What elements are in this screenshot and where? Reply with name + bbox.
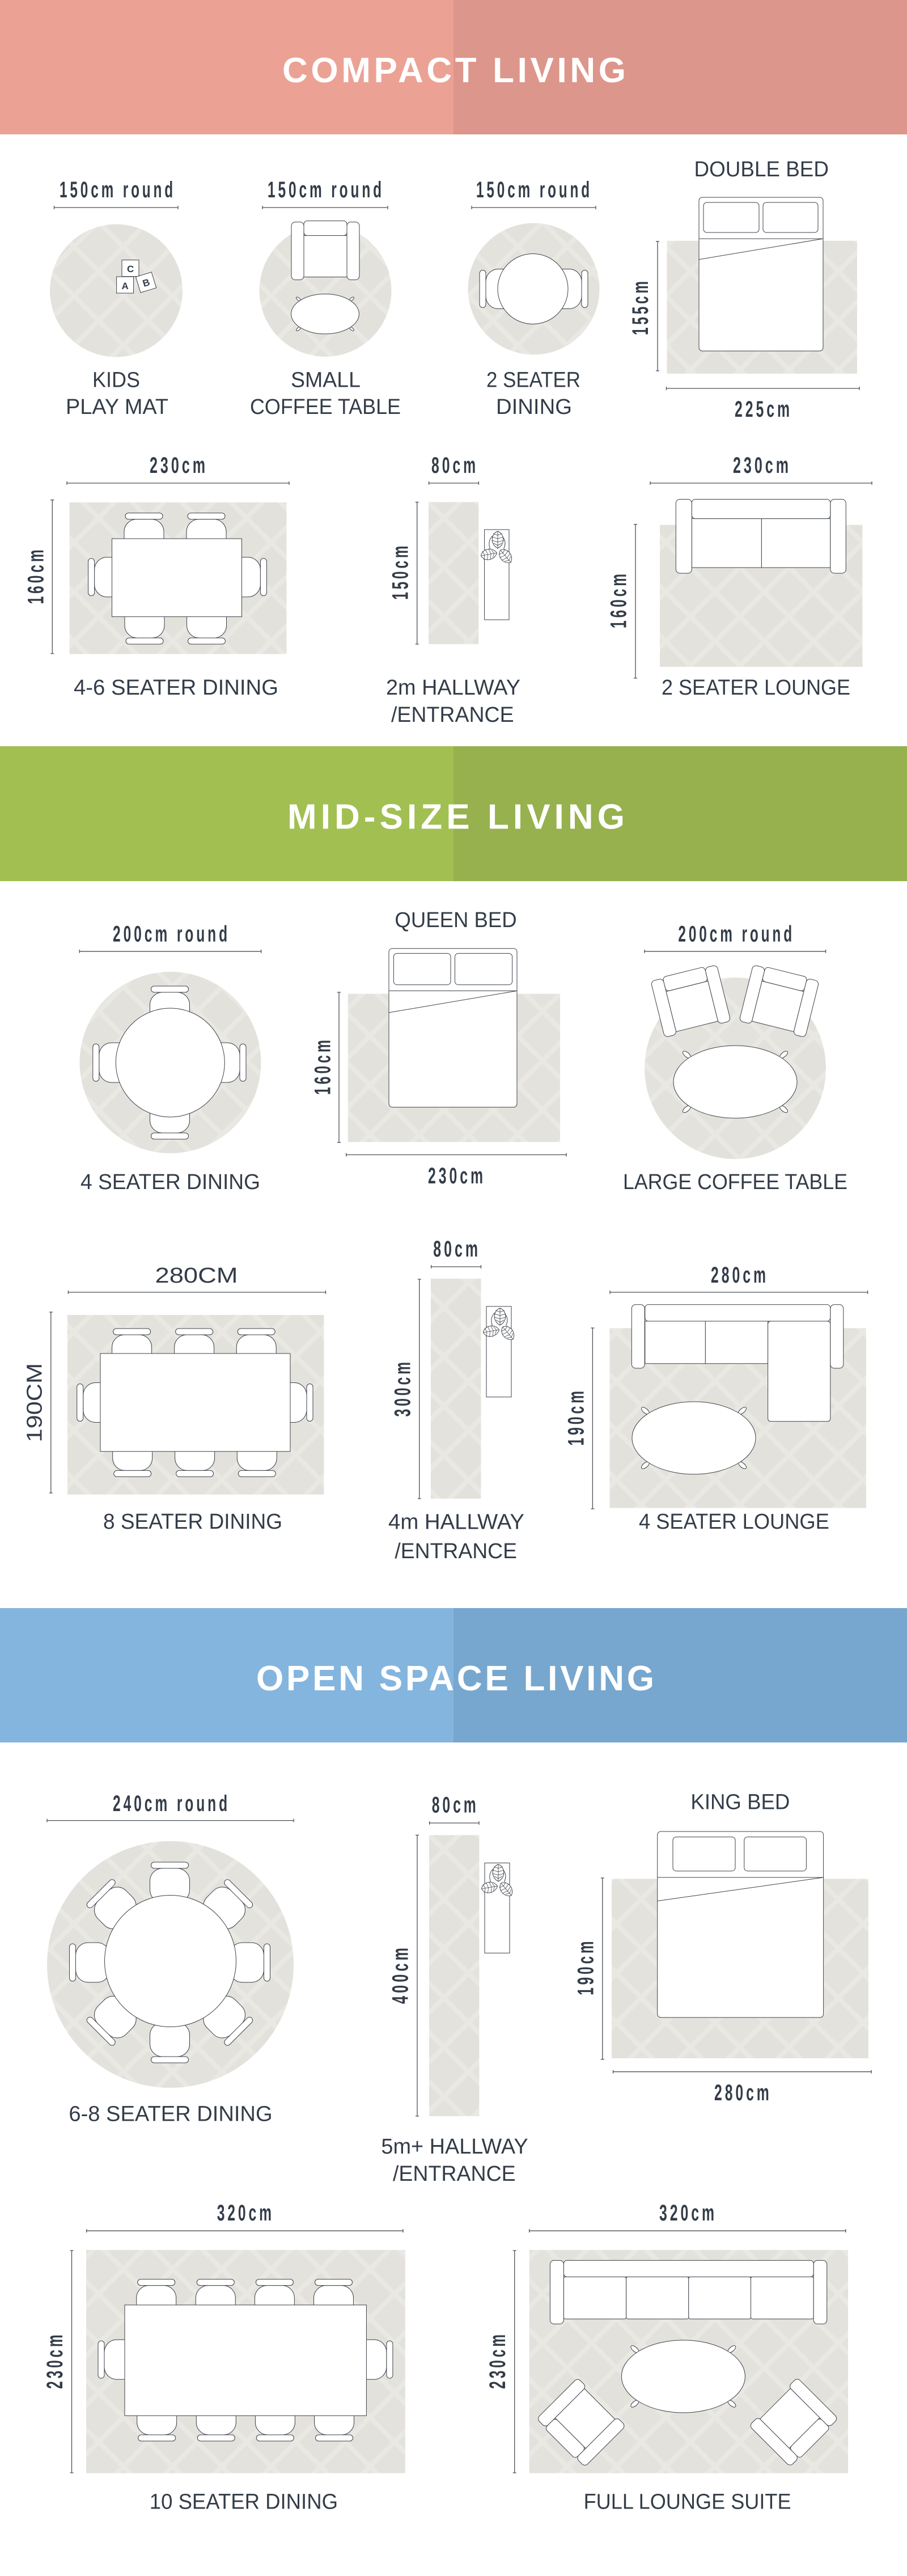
- panel: 4 seater lounge: 280cm: [711, 1263, 769, 1288]
- panel: king bed: KING BED: [690, 1790, 790, 1814]
- panel: 4-6 seater dining: [24, 453, 289, 700]
- panel: double bed: 155cm: [628, 278, 653, 335]
- panel: 4-6 seater dining: 230cm: [150, 453, 208, 478]
- panel: 8 seater dining: 190CM: [23, 1363, 46, 1443]
- panel: 10 seater dining: 230cm: [43, 2332, 67, 2389]
- panel: 4-6 seater dining: 160cm: [24, 547, 49, 604]
- panel: kids play mat: [50, 177, 183, 419]
- panel: 2 seater lounge: 2 SEATER LOUNGE: [662, 676, 850, 700]
- icon: alphabet blocks: C: [127, 264, 134, 274]
- panel: double bed: DOUBLE BED: [694, 158, 829, 181]
- icon: alphabet blocks: A: [121, 281, 129, 291]
- panel: 8 seater dining: 280CM: [155, 1264, 238, 1288]
- panel: 2m hallway: 2m HALLWAY: [386, 676, 520, 700]
- panel: queen bed: 230cm: [428, 1164, 486, 1188]
- panel: 4m hallway: [388, 1237, 524, 1563]
- header: compact living: [0, 0, 907, 134]
- panel: 4m hallway: 80cm: [433, 1237, 481, 1262]
- panel: 4 seater dining round: 200cm round: [113, 921, 230, 946]
- panel: 4 seater lounge: 190cm: [564, 1388, 589, 1446]
- panel: 5m hallway: 80cm: [432, 1792, 479, 1817]
- panel: 8 seater dining: [23, 1264, 325, 1534]
- panel: 10 seater dining: 320cm: [217, 2201, 274, 2226]
- panel: small coffee table: COFFEE TABLE: [250, 395, 401, 419]
- panel: 10 seater dining: [43, 2201, 405, 2514]
- panel: queen bed: [311, 908, 566, 1188]
- panel: 4-6 seater dining: 4-6 SEATER DINING: [74, 676, 278, 700]
- panel: kids play mat: 150cm round: [60, 177, 176, 202]
- panel: 2 seater dining round: 150cm round: [476, 177, 592, 202]
- panel: 2 seater lounge: 160cm: [607, 571, 631, 628]
- panel: 5m hallway: [381, 1792, 528, 2186]
- panel: queen bed: 160cm: [311, 1037, 336, 1095]
- panel: full lounge suite: FULL LOUNGE SUITE: [584, 2490, 791, 2514]
- panel: 2 seater lounge: [607, 453, 872, 700]
- panel: small coffee table: SMALL: [291, 369, 361, 392]
- panel: 2 seater dining round: DINING: [496, 395, 572, 419]
- panel: full lounge suite: [485, 2201, 848, 2514]
- panel: king bed: [573, 1790, 871, 2105]
- panel: small coffee table: [250, 177, 401, 419]
- panel: 4 seater dining round: 4 SEATER DINING: [80, 1170, 260, 1194]
- panel: large coffee table: LARGE COFFEE TABLE: [623, 1170, 847, 1194]
- header: mid-size living: MID-SIZE LIVING: [287, 797, 625, 837]
- panel: 2m hallway: /ENTRANCE: [391, 703, 514, 727]
- panel: full lounge suite: 320cm: [659, 2201, 717, 2226]
- panel: 10 seater dining: 10 SEATER DINING: [150, 2490, 338, 2514]
- panel: 4m hallway: /ENTRANCE: [395, 1539, 517, 1563]
- panel: 5m hallway: /ENTRANCE: [393, 2162, 516, 2186]
- panel: double bed: 225cm: [735, 397, 792, 422]
- icon: plant: [480, 531, 515, 566]
- panel: 4m hallway: 4m HALLWAY: [388, 1511, 524, 1534]
- panel: 2m hallway: [386, 453, 520, 727]
- panel: 5m hallway: 5m+ HALLWAY: [381, 2135, 528, 2159]
- panel: kids play mat: KIDS: [92, 369, 140, 392]
- icon: plant: [481, 1864, 515, 1899]
- panel: large coffee table: [623, 921, 847, 1194]
- panel: 6-8 seater dining round: 6-8 SEATER DINING: [69, 2103, 273, 2126]
- header: mid-size living: [0, 746, 907, 881]
- panel: 2 seater lounge: 230cm: [733, 453, 791, 478]
- panel: full lounge suite: 230cm: [485, 2332, 510, 2389]
- header: open space living: [0, 1608, 907, 1742]
- panel: double bed: [628, 158, 859, 422]
- panel: 8 seater dining: 8 SEATER DINING: [103, 1510, 282, 1534]
- panel: 6-8 seater dining round: 240cm round: [113, 1791, 230, 1816]
- panel: 5m hallway: 400cm: [388, 1945, 413, 2004]
- panel: kids play mat: PLAY MAT: [66, 395, 168, 419]
- icon: plant: [482, 1308, 517, 1343]
- header: open space living: OPEN SPACE LIVING: [256, 1659, 654, 1698]
- panel: 4 seater lounge: [564, 1263, 868, 1534]
- header: compact living: COMPACT LIVING: [282, 51, 626, 90]
- panel: queen bed: QUEEN BED: [395, 908, 517, 932]
- icon: alphabet blocks: B: [141, 277, 151, 289]
- panel: small coffee table: 150cm round: [268, 177, 384, 202]
- panel: 2 seater dining round: 2 SEATER: [486, 369, 580, 392]
- panel: king bed: 280cm: [714, 2080, 772, 2105]
- icon: alphabet blocks: [117, 260, 156, 293]
- panel: 6-8 seater dining round: [47, 1791, 294, 2126]
- panel: 2m hallway: 150cm: [388, 543, 413, 600]
- panel: large coffee table: 200cm round: [678, 921, 795, 946]
- panel: 4 seater dining round: [79, 921, 261, 1194]
- panel: king bed: 190cm: [573, 1939, 598, 1995]
- panel: 2m hallway: 80cm: [431, 453, 478, 478]
- panel: 2 seater dining round: [468, 177, 600, 419]
- panel: 4m hallway: 300cm: [390, 1359, 415, 1416]
- panel: 4 seater lounge: 4 SEATER LOUNGE: [639, 1510, 829, 1534]
